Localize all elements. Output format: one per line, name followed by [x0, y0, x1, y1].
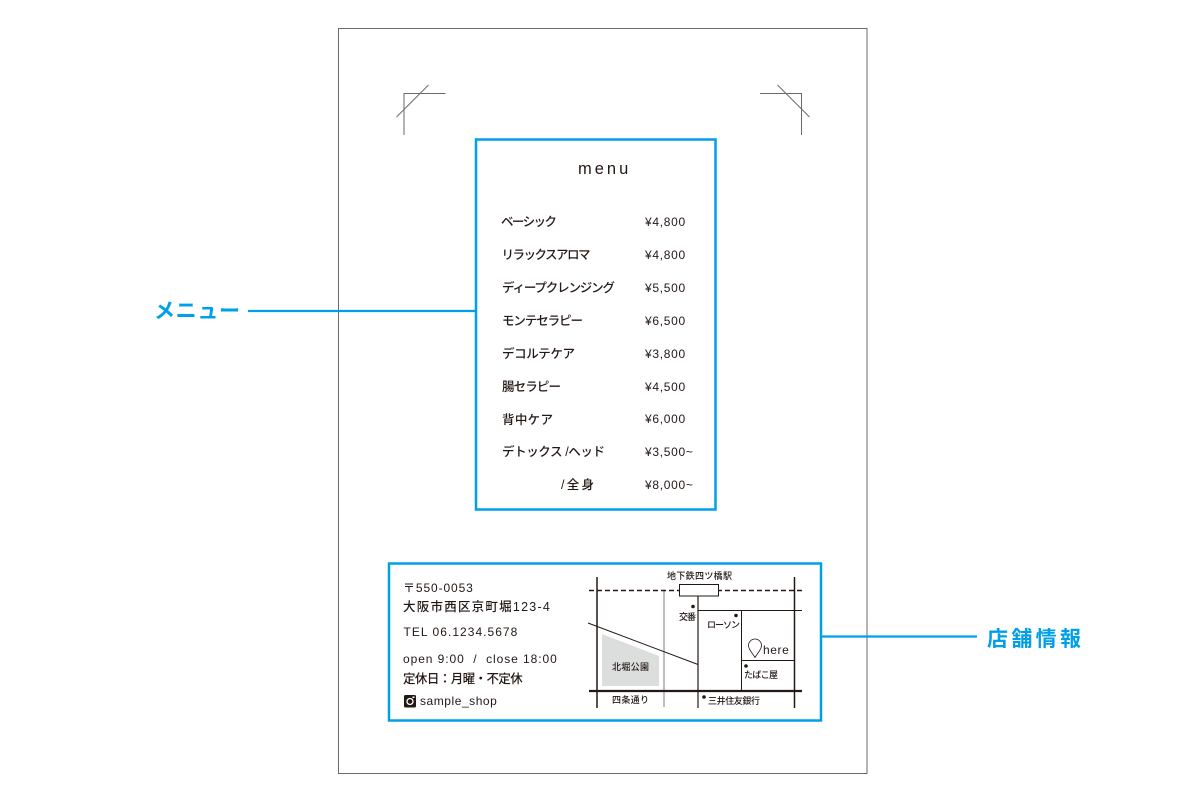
menu item names: ベーシック — [501, 215, 557, 229]
map: labels — [612, 570, 789, 706]
menu item names: モンテセラピー — [502, 314, 583, 328]
menu prices — [644, 215, 694, 492]
map: labels: 交番 — [679, 611, 696, 622]
address and contact text: 大阪市西区京町堀123-4 — [403, 599, 551, 614]
menu item names — [501, 215, 615, 492]
callout: shop info label: 店舗情報 — [987, 628, 1081, 651]
menu prices: ¥6,000 — [644, 412, 686, 426]
address and contact text: 定休日：月曜・不定休 — [403, 672, 524, 686]
crop mark: top left — [396, 85, 446, 135]
menu prices: ¥6,500 — [644, 314, 686, 328]
panel: shop info — [389, 564, 821, 720]
menu prices: ¥4,800 — [644, 248, 686, 262]
map: landmark dots — [691, 605, 748, 699]
menu prices: ¥3,500~ — [644, 445, 694, 459]
map: labels: here — [763, 643, 789, 657]
map: labels: ローソン — [707, 620, 740, 630]
menu item names: ディープクレンジング — [502, 280, 615, 295]
menu item names: 背中ケア — [502, 412, 553, 427]
connector: shop info — [821, 635, 977, 638]
menu prices: ¥8,000~ — [644, 478, 694, 492]
address and contact text: sample_shop — [420, 694, 498, 708]
menu item names: デトックス /ヘッド — [502, 444, 605, 459]
menu prices: ¥4,800 — [644, 215, 686, 229]
map: labels: 四条通り — [612, 694, 649, 705]
map: labels: 三井住友銀行 — [708, 695, 760, 706]
heading: menu: menu — [578, 160, 631, 178]
map: labels: 地下鉄四ツ橋駅 — [667, 570, 732, 581]
connector: menu — [248, 310, 475, 312]
callout: menu label: メニュー — [154, 300, 240, 323]
map: park — [602, 634, 659, 686]
address and contact text: 〒550-0053 — [403, 581, 474, 595]
crop mark: top right — [760, 85, 810, 135]
menu prices: ¥3,800 — [644, 347, 686, 361]
address and contact text: TEL 06.1234.5678 — [404, 625, 518, 639]
map: station — [680, 584, 718, 596]
map — [588, 570, 802, 708]
menu item names: 腸セラピー — [502, 380, 561, 394]
menu item names: デコルテケア — [502, 346, 575, 361]
card outline — [338, 28, 867, 774]
icon: map pin — [748, 639, 762, 658]
menu prices: ¥5,500 — [644, 281, 686, 295]
icon: instagram — [404, 695, 416, 708]
menu item names: /全身 — [561, 477, 594, 492]
map: labels: 北堀公園 — [612, 662, 649, 672]
map: roads — [588, 577, 802, 708]
panel: menu — [476, 140, 716, 510]
menu item names: リラックスアロマ — [502, 248, 590, 262]
address and contact text — [403, 581, 558, 708]
map: labels: たばこ屋 — [744, 669, 778, 680]
menu prices: ¥4,500 — [644, 380, 686, 394]
address and contact text: open 9:00 / close 18:00 — [403, 652, 558, 666]
